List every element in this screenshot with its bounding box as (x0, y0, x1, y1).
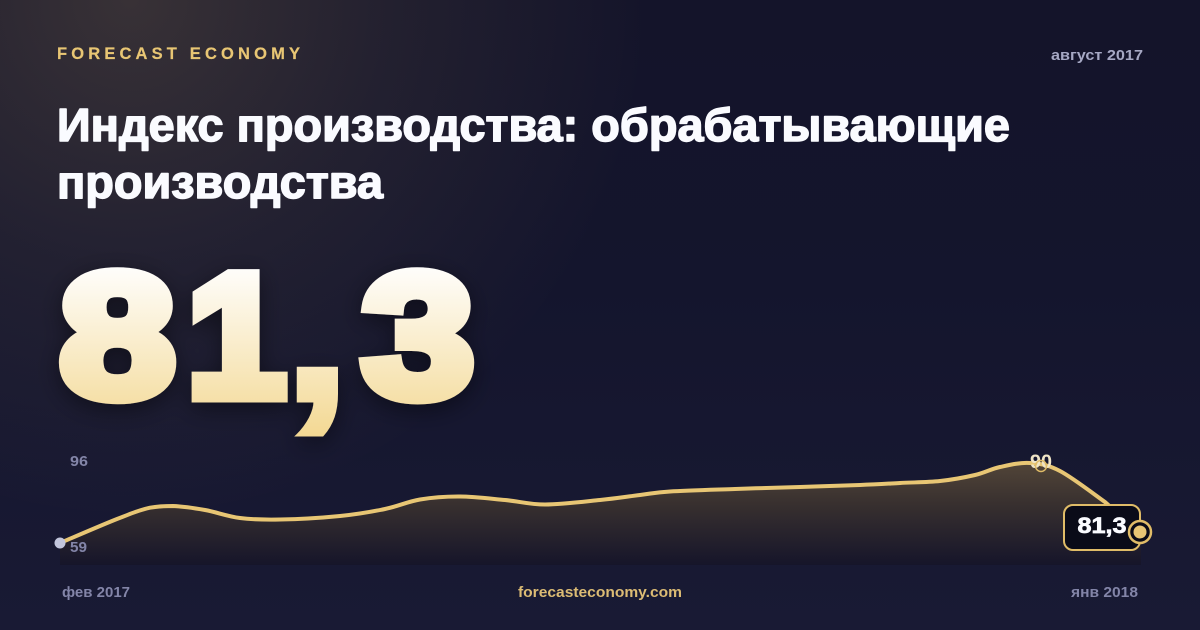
title (57, 99, 1010, 208)
sparkline area (60, 463, 1141, 565)
title: Индекс производства: обрабатывающие (57, 99, 1010, 151)
big value (60, 202, 474, 448)
big value: , (280, 202, 354, 448)
axis max label: 96 (70, 453, 88, 470)
sparkline line (60, 463, 1115, 543)
date label: август 2017 (1051, 47, 1143, 64)
big value: 1 (187, 239, 286, 434)
big value: 8 (60, 239, 175, 434)
x axis end label: янв 2018 (1071, 584, 1138, 601)
end point marker (1129, 521, 1151, 543)
big value: 3 (362, 239, 474, 434)
brand label: FORECAST ECONOMY (57, 45, 300, 63)
start point (54, 538, 66, 548)
website: forecasteconomy.com (518, 584, 682, 601)
axis min label: 59 (70, 539, 87, 556)
peak label: 90 (1030, 452, 1052, 473)
callout: current value (1064, 505, 1140, 550)
title: производства (57, 156, 383, 208)
callout: current value: 81,3 (1078, 513, 1126, 538)
x axis start label: фев 2017 (62, 584, 130, 601)
